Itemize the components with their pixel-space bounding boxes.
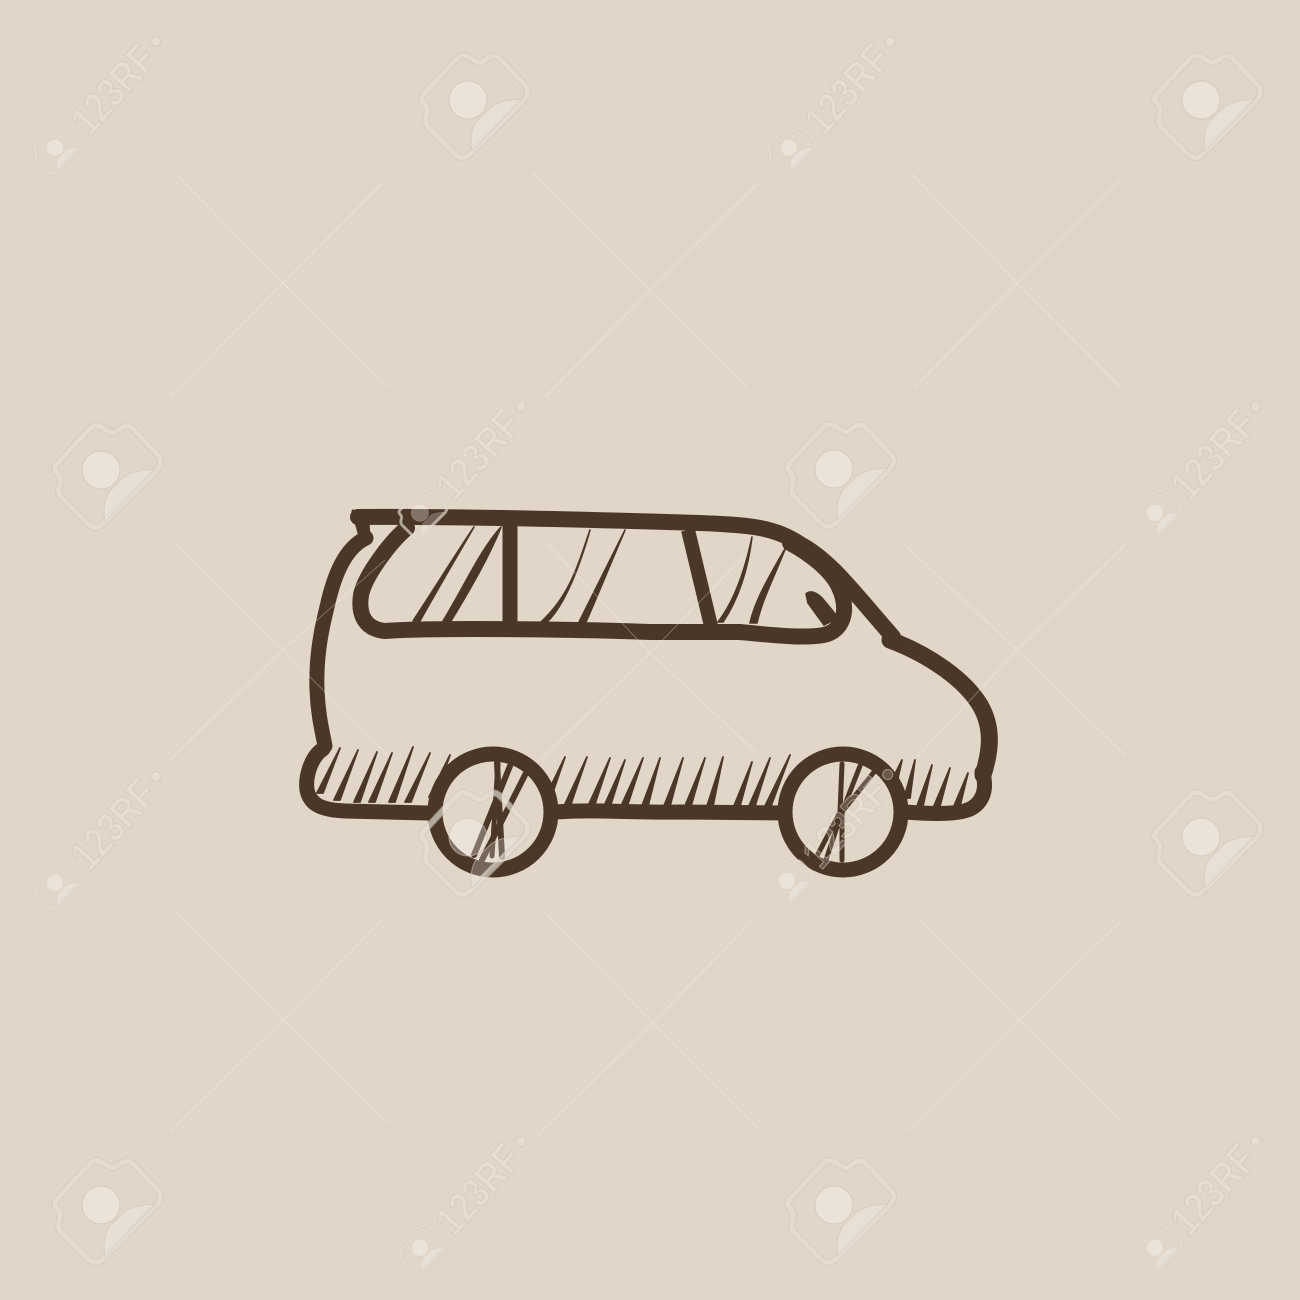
wordmark third row left <box>11 751 184 932</box>
van roof and windshield line <box>358 517 893 637</box>
wordmark top right: 123RF <box>795 35 899 144</box>
wordmark second row right: 123RF <box>1161 400 1265 509</box>
wordmark bottom right <box>1111 1116 1284 1297</box>
wordmark bottom right: 123RF <box>1161 1135 1265 1244</box>
window frame <box>360 528 844 637</box>
icon: minivan sketch <box>307 511 989 870</box>
front wheel <box>785 754 901 870</box>
wordmark third row right <box>743 749 916 930</box>
wordmark bottom left <box>376 1116 549 1297</box>
van front sill <box>905 772 985 813</box>
wordmark top left <box>11 16 184 197</box>
van rear roof hook <box>353 511 369 535</box>
wordmark top left: 123RF <box>61 35 165 144</box>
window pillar two <box>688 530 711 626</box>
van rear wall <box>317 538 366 746</box>
van rear bumper and sill <box>307 749 428 813</box>
window pillar one <box>502 526 518 626</box>
window hatching <box>413 527 838 625</box>
rear wheel <box>435 754 551 870</box>
wordmark third row left: 123RF <box>61 770 165 879</box>
windshield thick wedge <box>800 540 853 612</box>
wordmark second row left: 123RF <box>426 400 530 509</box>
wordmark second row right <box>1111 381 1284 562</box>
van hood and front bumper <box>890 640 989 775</box>
underbody hatching <box>317 747 968 806</box>
wordmark second row left <box>376 381 549 562</box>
wordmark third row right: 123RF <box>793 768 897 877</box>
watermark guide lines <box>170 172 1125 1135</box>
van sill between wheels <box>555 811 785 813</box>
wordmark top right <box>745 16 918 197</box>
wordmark bottom left: 123RF <box>426 1135 530 1244</box>
